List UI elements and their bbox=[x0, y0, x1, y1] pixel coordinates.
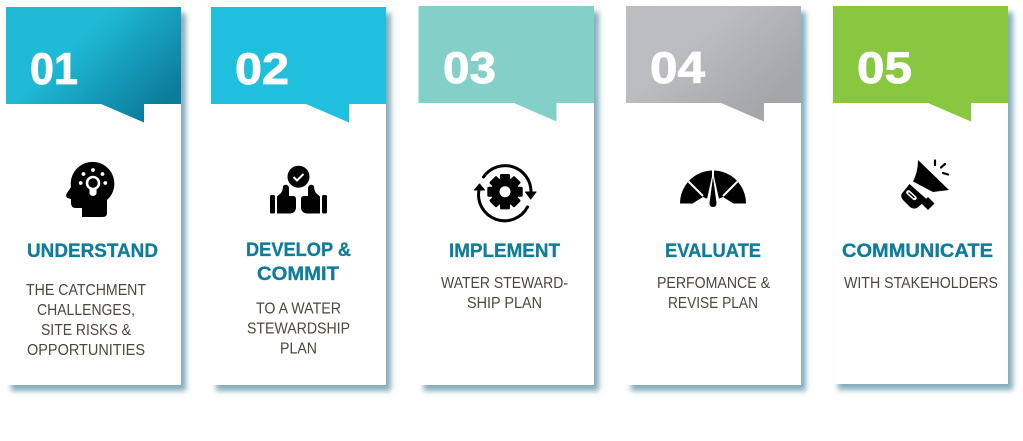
number 04: 04 bbox=[650, 44, 705, 93]
body text: develop and commit bbox=[247, 300, 350, 358]
heading: communicate: COMMUNICATE bbox=[842, 240, 993, 262]
header banner 02 bbox=[211, 7, 386, 122]
body text: communicate: WITH STAKEHOLDERS bbox=[844, 275, 998, 292]
icon: two thumbs up with check bbox=[270, 166, 327, 214]
header banner 05 bbox=[833, 6, 1008, 122]
heading: develop and commit: COMMIT bbox=[257, 263, 339, 285]
body text: evaluate: REVISE PLAN bbox=[668, 295, 758, 312]
number 03: 03 bbox=[443, 44, 496, 93]
body text: understand: SITE RISKS & bbox=[41, 322, 132, 339]
heading: evaluate: EVALUATE bbox=[665, 240, 761, 262]
icon: head with lightbulb bbox=[66, 162, 114, 217]
body text: develop and commit: PLAN bbox=[280, 340, 317, 358]
heading: develop and commit bbox=[246, 239, 351, 285]
number 05: 05 bbox=[857, 44, 912, 93]
icon: performance gauge bbox=[680, 169, 746, 207]
body text: understand: THE CATCHMENT bbox=[26, 282, 146, 299]
body text: understand: CHALLENGES, bbox=[37, 302, 135, 319]
body text: implement: SHIP PLAN bbox=[467, 295, 542, 312]
header banner 04 bbox=[626, 6, 801, 122]
icon: megaphone bbox=[901, 160, 949, 210]
heading: implement: IMPLEMENT bbox=[449, 240, 560, 262]
body text: implement bbox=[441, 275, 568, 312]
panel: card 03 implement bbox=[418, 6, 594, 385]
body text: develop and commit: TO A WATER bbox=[256, 300, 341, 318]
body text: understand bbox=[26, 282, 146, 359]
body text: understand: OPPORTUNITIES bbox=[27, 342, 145, 359]
panel: card 04 evaluate bbox=[626, 6, 801, 385]
panel: card 02 develop and commit bbox=[211, 7, 386, 385]
number 02: 02 bbox=[235, 45, 289, 94]
body text: evaluate bbox=[657, 275, 771, 312]
panel: card 05 communicate bbox=[833, 6, 1008, 384]
heading: understand: UNDERSTAND bbox=[27, 240, 158, 262]
body text: implement: WATER STEWARD- bbox=[441, 275, 568, 292]
header banner 03 bbox=[418, 6, 594, 122]
body text: develop and commit: STEWARDSHIP bbox=[247, 320, 350, 338]
panel: card 01 understand bbox=[6, 7, 181, 385]
number 01: 01 bbox=[30, 45, 78, 94]
body text: evaluate: PERFOMANCE & bbox=[657, 275, 771, 292]
header banner 01 bbox=[6, 7, 181, 122]
icon: gear with rotating arrows bbox=[474, 166, 536, 221]
heading: develop and commit: DEVELOP & bbox=[246, 239, 351, 261]
